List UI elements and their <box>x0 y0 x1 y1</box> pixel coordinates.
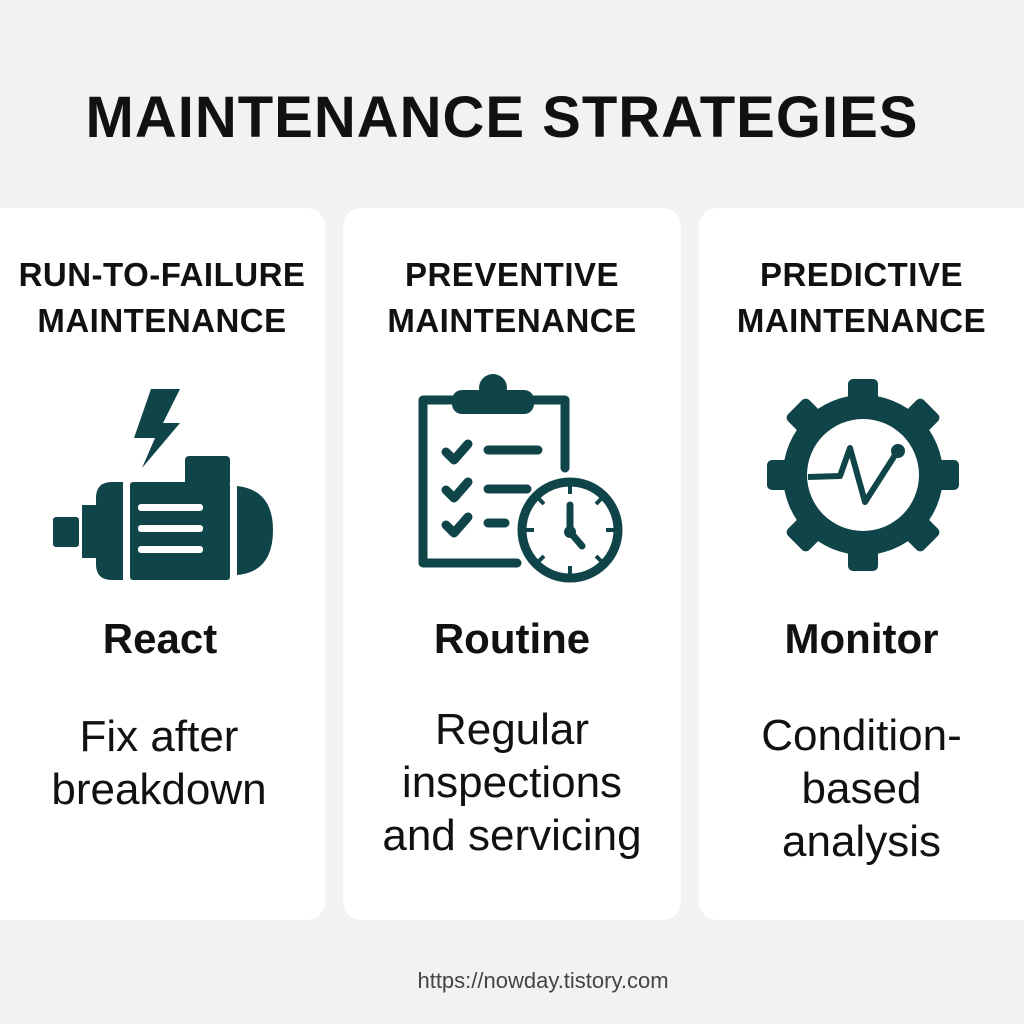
text: condition-based: analysis <box>782 817 941 866</box>
label: Monitor: Monitor <box>785 615 938 662</box>
text: regular inspections: and servicing <box>382 811 642 860</box>
heading: run-to-failure <box>19 256 305 339</box>
text: regular inspections <box>382 705 642 860</box>
panel: predictive <box>699 208 1024 920</box>
icon: motor with lightning <box>53 389 273 580</box>
icon: clipboard with clock <box>423 400 618 578</box>
heading: run-to-failure: MAINTENANCE <box>37 302 287 339</box>
panel: run-to-failure <box>0 208 325 920</box>
text: fix after breakdown: breakdown <box>51 765 267 814</box>
text: regular inspections: Regular <box>435 705 589 754</box>
heading: preventive: PREVENTIVE <box>405 256 619 293</box>
text: fix after breakdown <box>51 712 267 814</box>
footer url: https://nowday.tistory.com <box>417 968 669 993</box>
heading: preventive: MAINTENANCE <box>387 302 637 339</box>
label: Routine: Routine <box>434 615 590 662</box>
heading: preventive <box>387 256 637 339</box>
text: condition-based: Condition- <box>761 711 962 760</box>
heading: predictive: MAINTENANCE <box>737 302 986 339</box>
icon: gear with pulse <box>767 379 959 571</box>
text: condition-based <box>761 711 962 866</box>
title: MAINTENANCE STRATEGIES <box>86 85 918 150</box>
text: condition-based: based <box>802 764 921 813</box>
heading: predictive: PREDICTIVE <box>760 256 963 293</box>
panel: preventive <box>343 208 681 920</box>
label: React: React <box>103 615 217 662</box>
heading: predictive <box>737 256 986 339</box>
heading: run-to-failure: RUN-TO-FAILURE <box>19 256 305 293</box>
text: fix after breakdown: Fix after <box>80 712 238 761</box>
text: regular inspections: inspections <box>402 758 622 807</box>
